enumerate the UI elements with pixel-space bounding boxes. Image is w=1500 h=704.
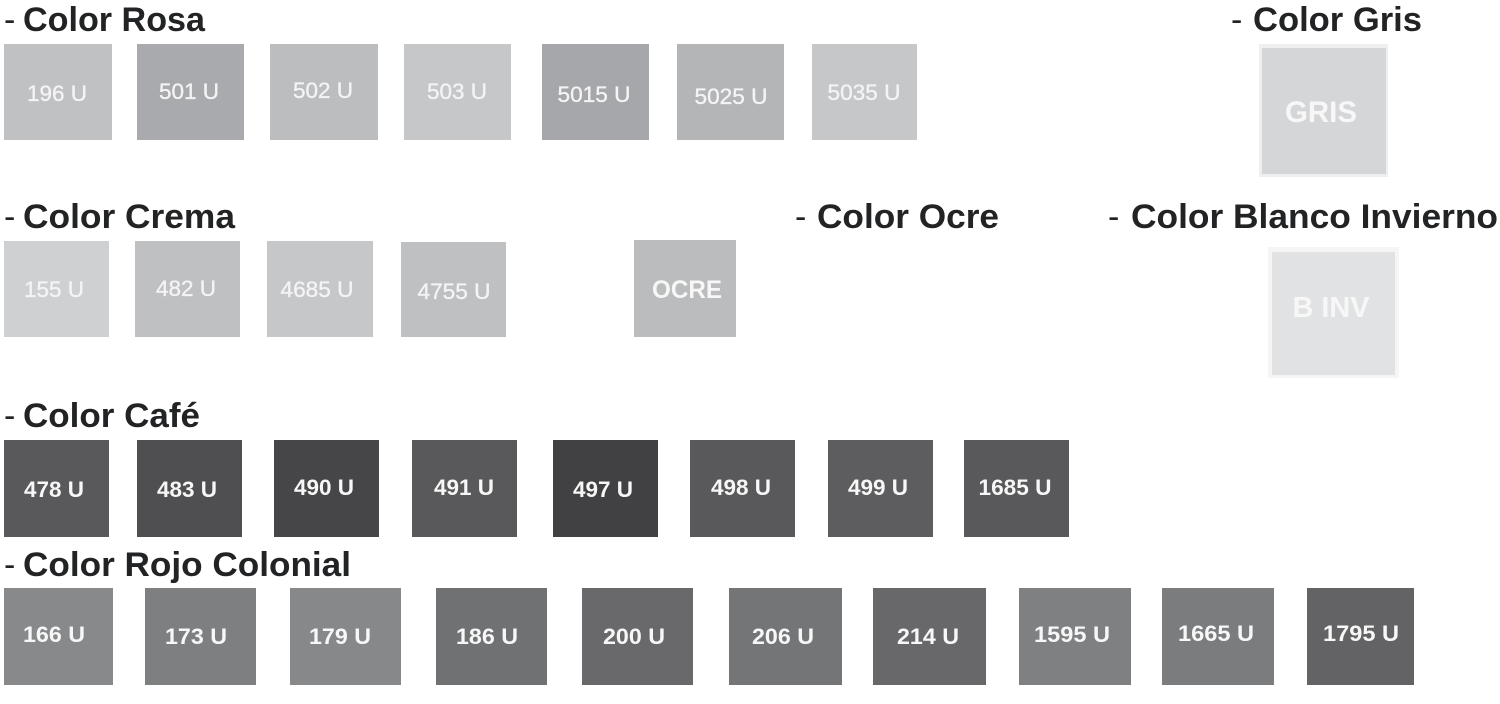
swatch 502 U: 502 U bbox=[293, 78, 353, 103]
swatch 1595 U bbox=[1019, 588, 1131, 685]
swatch 503 U bbox=[404, 44, 511, 140]
swatch 1665 U bbox=[1162, 588, 1274, 685]
swatch 206 U bbox=[729, 588, 842, 685]
swatch 482 U bbox=[135, 241, 240, 337]
panel: Color Rosa bbox=[4, 1, 917, 140]
swatch 5025 U bbox=[677, 44, 784, 140]
swatch 5015 U: 5015 U bbox=[558, 82, 630, 107]
swatch 155 U bbox=[4, 241, 109, 337]
heading: Color Rojo Colonial: - bbox=[4, 546, 15, 584]
swatch 206 U: 206 U bbox=[752, 624, 814, 649]
heading: Color Rosa: Color Rosa bbox=[23, 1, 206, 39]
swatch GRIS bbox=[1259, 44, 1388, 177]
swatch 478 U: 478 U bbox=[24, 477, 84, 502]
panel: Color Ocre bbox=[634, 198, 999, 337]
swatch 200 U bbox=[582, 588, 693, 685]
swatch 1685 U: 1685 U bbox=[978, 475, 1052, 500]
swatch 179 U: 179 U bbox=[309, 624, 371, 649]
heading: Color Rojo Colonial: Color Rojo Colonial bbox=[23, 546, 351, 584]
swatch 502 U bbox=[270, 44, 378, 140]
swatch 155 U: 155 U bbox=[24, 277, 84, 302]
swatch 186 U: 186 U bbox=[456, 624, 518, 649]
swatch 1795 U bbox=[1307, 588, 1414, 685]
swatch 5035 U: 5035 U bbox=[828, 80, 900, 105]
swatch 491 U: 491 U bbox=[434, 475, 494, 500]
swatch GRIS: GRIS bbox=[1285, 96, 1357, 129]
swatch 4755 U bbox=[401, 242, 506, 337]
swatch 497 U bbox=[553, 440, 658, 537]
swatch 166 U bbox=[4, 588, 113, 685]
swatch 497 U: 497 U bbox=[573, 477, 633, 502]
swatch B INV: B INV bbox=[1292, 292, 1370, 324]
swatch 4755 U: 4755 U bbox=[418, 279, 490, 304]
swatch 490 U: 490 U bbox=[294, 475, 354, 500]
panel: Color Rojo Colonial bbox=[4, 546, 1414, 685]
swatch OCRE: OCRE bbox=[652, 276, 722, 304]
swatch 179 U bbox=[290, 588, 401, 685]
swatch 5035 U bbox=[812, 44, 917, 140]
swatch 1795 U: 1795 U bbox=[1323, 621, 1399, 646]
swatch 499 U bbox=[828, 440, 933, 537]
swatch 196 U: 196 U bbox=[27, 81, 87, 106]
panel: Color Gris bbox=[1231, 1, 1422, 177]
heading: Color Crema: - bbox=[4, 198, 15, 236]
swatch 214 U: 214 U bbox=[897, 624, 959, 649]
panel: Color Blanco Invierno bbox=[1108, 198, 1498, 378]
heading: Color Crema: Color Crema bbox=[23, 198, 236, 236]
swatch 1685 U bbox=[964, 440, 1069, 537]
swatch 1595 U: 1595 U bbox=[1034, 622, 1110, 647]
panel: Color Café bbox=[4, 397, 1069, 537]
swatch 200 U: 200 U bbox=[603, 624, 665, 649]
swatch 5025 U: 5025 U bbox=[694, 84, 768, 109]
swatch 173 U: 173 U bbox=[165, 624, 227, 649]
swatch 173 U bbox=[145, 588, 256, 685]
swatch 214 U bbox=[873, 588, 986, 685]
swatch 5015 U bbox=[542, 44, 649, 140]
swatch B INV bbox=[1268, 247, 1399, 378]
heading: Color Blanco Invierno: - bbox=[1108, 198, 1119, 236]
swatch 166 U: 166 U bbox=[23, 622, 85, 647]
swatch 196 U bbox=[4, 44, 112, 140]
swatch 501 U: 501 U bbox=[159, 79, 219, 104]
swatch OCRE bbox=[634, 240, 736, 337]
heading: Color Gris: - bbox=[1231, 1, 1242, 39]
swatch 490 U bbox=[274, 440, 379, 537]
swatch 478 U bbox=[4, 440, 109, 537]
swatch 501 U bbox=[137, 44, 244, 140]
heading: Color Ocre: Color Ocre bbox=[817, 198, 999, 236]
swatch 186 U bbox=[436, 588, 547, 685]
swatch 503 U: 503 U bbox=[427, 79, 487, 104]
swatch 4685 U bbox=[267, 241, 373, 337]
heading: Color Café: Color Café bbox=[23, 397, 200, 435]
swatch 483 U: 483 U bbox=[157, 477, 217, 502]
panel: Color Crema bbox=[4, 198, 506, 337]
heading: Color Blanco Invierno: Color Blanco Invierno bbox=[1131, 198, 1498, 236]
heading: Color Ocre: - bbox=[795, 198, 806, 236]
swatch 499 U: 499 U bbox=[848, 475, 908, 500]
swatch 4685 U: 4685 U bbox=[280, 277, 354, 302]
swatch 1665 U: 1665 U bbox=[1178, 621, 1254, 646]
swatch 491 U bbox=[412, 440, 517, 537]
swatch 498 U bbox=[690, 440, 795, 537]
heading: Color Rosa: - bbox=[4, 1, 15, 39]
heading: Color Café: - bbox=[4, 397, 15, 435]
swatch 482 U: 482 U bbox=[156, 276, 216, 301]
heading: Color Gris: Color Gris bbox=[1253, 1, 1422, 39]
swatch 483 U bbox=[137, 440, 242, 537]
swatch 498 U: 498 U bbox=[711, 475, 771, 500]
